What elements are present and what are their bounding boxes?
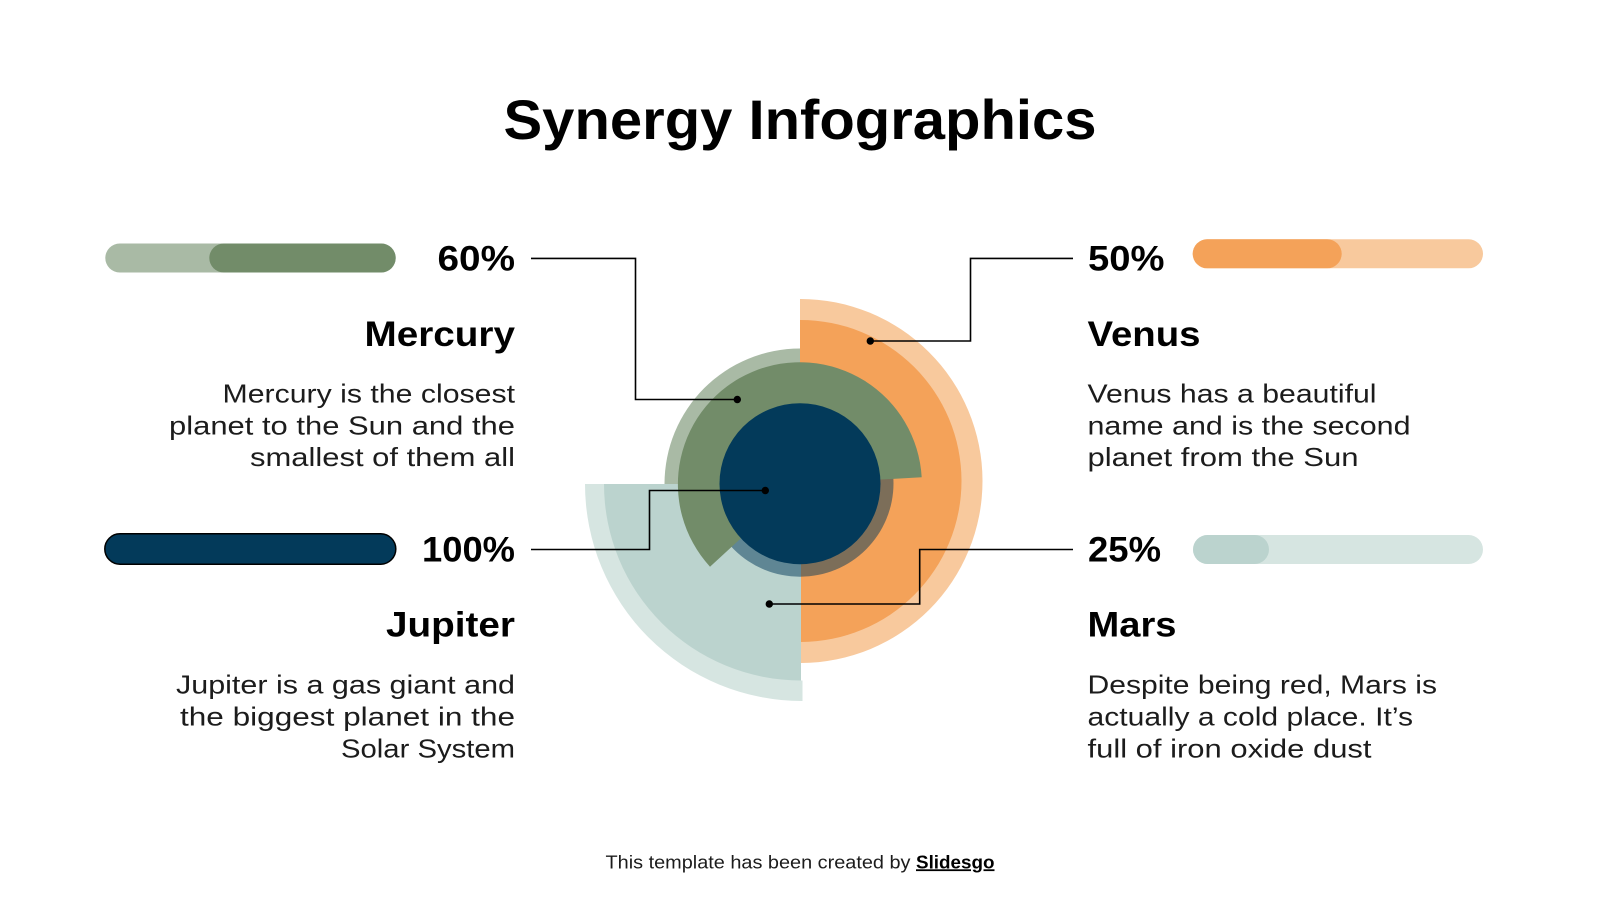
description: Mars	[1088, 669, 1437, 763]
progress bar: Jupiter 100%	[105, 534, 396, 564]
panel: Mars	[1088, 530, 1483, 763]
description: Mercury: smallest of them all	[250, 442, 515, 472]
description: Mars: Despite being red, Mars is	[1088, 669, 1437, 699]
Mars value arc	[604, 484, 801, 680]
Mercury value arc	[678, 362, 922, 567]
heading: Venus: Venus	[1088, 315, 1200, 354]
title: Synergy Infographics	[504, 88, 1096, 151]
description: Mars: full of iron oxide dust	[1088, 733, 1372, 763]
connector: Venus	[867, 258, 1073, 345]
description: Venus	[1088, 378, 1410, 472]
Venus value arc	[800, 320, 962, 642]
description: Mercury: planet to the Sun and the	[169, 410, 515, 440]
description: Mars: actually a cold place. It’s	[1088, 701, 1413, 731]
heading: Mars: Mars	[1088, 606, 1176, 645]
Mars track arc	[585, 484, 802, 701]
Jupiter translucent ring	[706, 390, 894, 577]
description: Jupiter	[176, 669, 515, 763]
Jupiter core circle	[720, 403, 880, 564]
connector: Mercury	[531, 258, 741, 403]
description: Jupiter: Solar System	[341, 733, 515, 763]
value: 100%: 100%	[422, 530, 515, 569]
Mercury track arc	[664, 348, 800, 484]
heading: Jupiter: Jupiter	[386, 606, 515, 645]
Venus track arc	[800, 299, 983, 663]
heading: Mercury: Mercury	[364, 315, 516, 354]
description: Venus: planet from the Sun	[1088, 442, 1358, 472]
description: Venus: name and is the second	[1088, 410, 1410, 440]
progress bar: Mercury 60%	[105, 244, 396, 272]
description: Mercury: Mercury is the closest	[222, 378, 516, 408]
value: 25%: 25%	[1088, 530, 1161, 569]
progress bar: Mars 25%	[1193, 535, 1483, 564]
progress bar: Venus 50%	[1193, 239, 1483, 268]
radial chart	[585, 299, 983, 701]
connector: Mars	[766, 550, 1073, 608]
description: Jupiter: Jupiter is a gas giant and	[176, 669, 515, 699]
description: Mercury	[169, 378, 516, 472]
footer credit: This template has been created by	[606, 852, 910, 872]
panel: Venus	[1088, 239, 1483, 472]
value: 50%: 50%	[1088, 239, 1164, 278]
description: Jupiter: the biggest planet in the	[180, 701, 515, 731]
footer credit: Slidesgo	[916, 852, 995, 872]
panel: Mercury	[105, 239, 516, 472]
description: Venus: Venus has a beautiful	[1088, 378, 1376, 408]
value: 60%: 60%	[438, 239, 515, 278]
panel: Jupiter	[105, 530, 515, 763]
connector: Jupiter	[531, 487, 769, 550]
